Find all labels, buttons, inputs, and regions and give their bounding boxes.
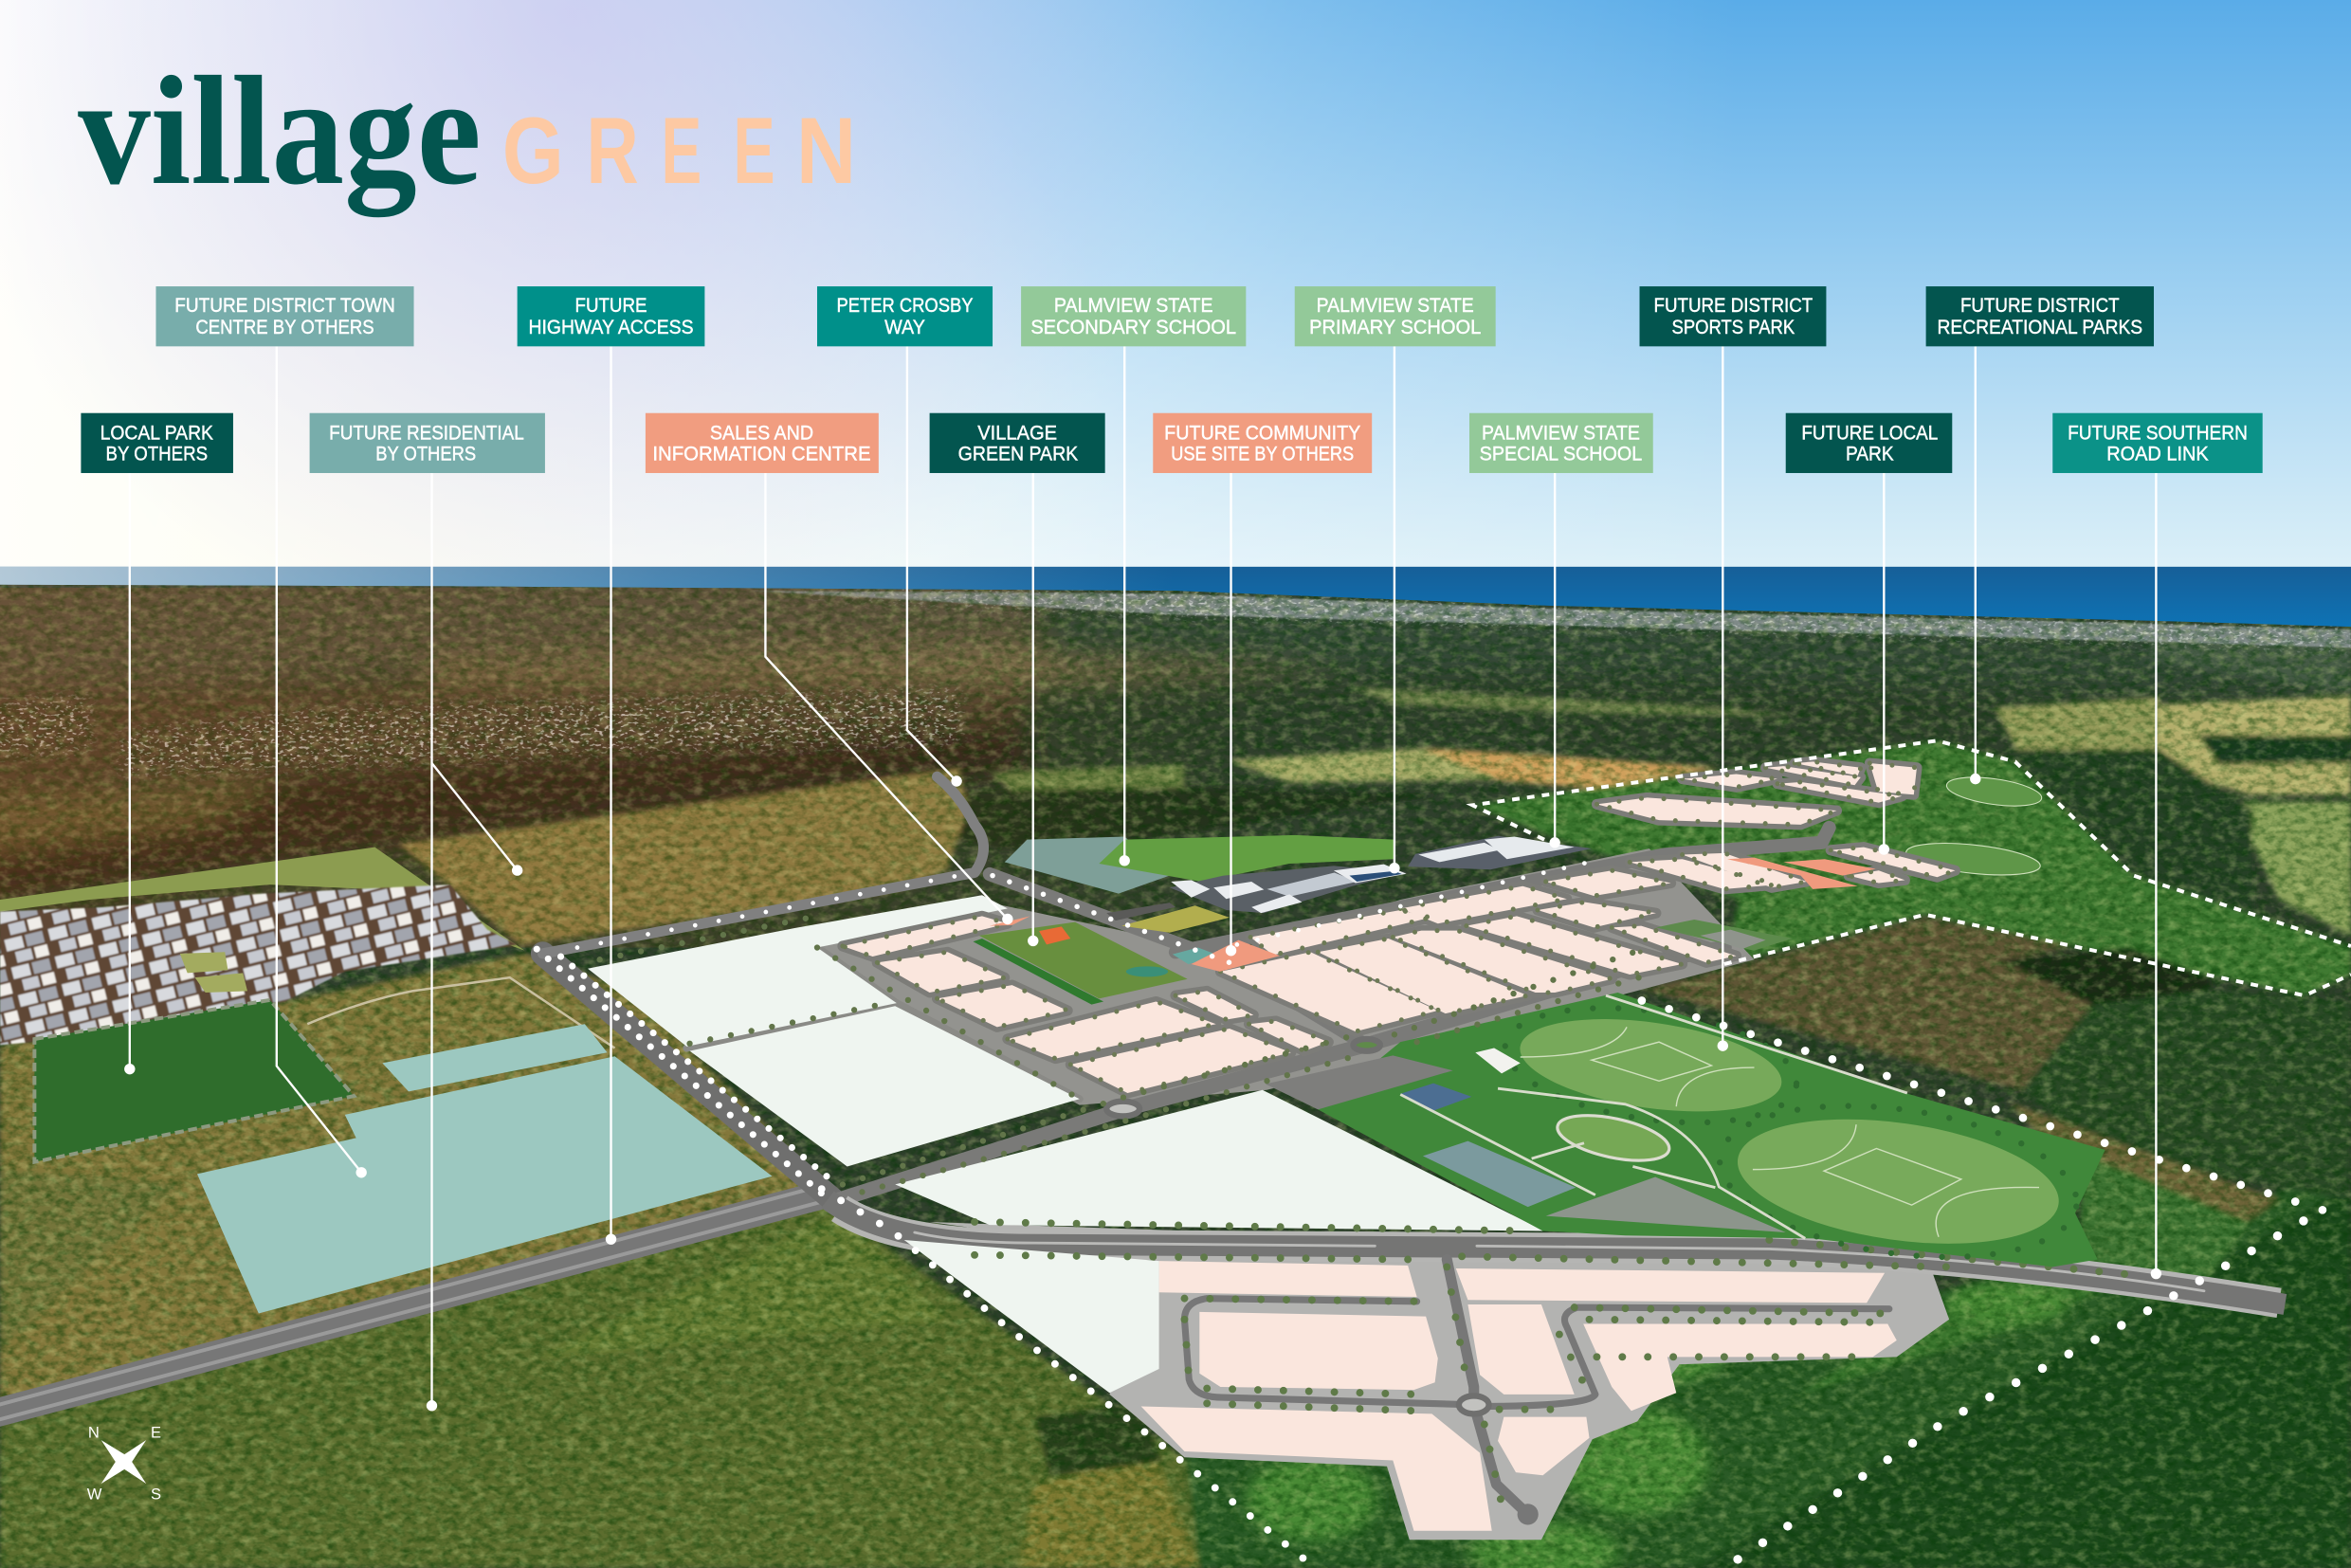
label: future southern road link: ROAD LINK [2106, 444, 2209, 465]
label: future district town centre: FUTURE DISTRICT TOWN [174, 295, 395, 317]
label: future district town centre: CENTRE BY OTHERS [195, 317, 374, 338]
label: peter crosby way [817, 286, 993, 346]
light grass texture [0, 900, 2351, 1568]
street grid around upper lots [843, 761, 1955, 1093]
photographic land base [0, 570, 2351, 1568]
logo word: green: G [502, 99, 564, 204]
label: palmview state primary school: PALMVIEW STATE [1317, 295, 1474, 317]
development ground under upper lots [817, 848, 1755, 1105]
leader lines and markers [124, 346, 2161, 1411]
label: future southern road link: FUTURE SOUTHERN [2068, 422, 2248, 444]
leader: district sports park [1718, 346, 1728, 1051]
northern sports oval [1514, 1005, 1787, 1126]
secondary school oval [1099, 835, 1394, 882]
main boulevard asphalt [828, 1199, 2285, 1304]
street trees around upper lots [843, 761, 1955, 1093]
school field [1121, 905, 1230, 933]
dirt track [307, 977, 614, 1048]
upper residential lots [843, 761, 1955, 1093]
pond [1423, 1141, 1576, 1207]
estate lawn above suburb [0, 848, 525, 951]
leader: community use site [1226, 472, 1236, 956]
town centre upper block [382, 1024, 608, 1091]
logo word: green: E [733, 99, 775, 204]
label: future district recreational parks: FUTURE DISTRICT [1960, 295, 2120, 317]
label: future residential by others: FUTURE RESIDENTIAL [329, 422, 524, 444]
label: future district recreational parks: RECREATIONAL PARKS [1937, 317, 2142, 338]
leader: sales and information centre [765, 472, 1013, 924]
cul-de-sac turning head [1518, 1504, 1539, 1524]
community use site [1173, 940, 1280, 972]
existing suburb houses [0, 884, 518, 1045]
car park [1266, 1055, 1453, 1109]
sea on the horizon [0, 567, 2351, 642]
label: future community use site by others [1153, 413, 1372, 473]
right forest and green land [1184, 1170, 2351, 1568]
lower block street trees [975, 1222, 2129, 1514]
pitch markings [1521, 1027, 2039, 1237]
leader: future district town centre [277, 346, 367, 1177]
village green park [973, 922, 1188, 1005]
sky background [0, 0, 2351, 570]
boundary south west [822, 1189, 1304, 1559]
road network [0, 776, 2285, 1514]
white future lots [588, 895, 1544, 1393]
label: village green park [930, 413, 1105, 473]
road side trees [600, 918, 1649, 1192]
label: palmview state secondary school [1021, 286, 1246, 346]
compass star [101, 1440, 146, 1484]
mid-left scrub [0, 954, 840, 1402]
leader: village green park [1028, 472, 1038, 946]
park tree rings [1498, 992, 2087, 1278]
leader: primary school [1389, 346, 1400, 873]
leader: special school [1549, 472, 1560, 848]
label: future district sports park [1640, 286, 1826, 346]
collector along schools [990, 828, 1830, 1045]
southern sports oval [1730, 1101, 2067, 1262]
label: palmview state secondary school: SECONDARY SCHOOL [1030, 317, 1236, 338]
label: peter crosby way: PETER CROSBY [837, 295, 974, 317]
label: palmview state special school: PALMVIEW STATE [1482, 422, 1640, 444]
label: future district recreational parks [1926, 286, 2154, 346]
leader: southern road link [2151, 472, 2161, 1279]
clubhouse roof [1475, 1048, 1521, 1073]
label: future southern road link [2052, 413, 2263, 473]
fine dashed boundaries [1724, 915, 2351, 995]
grey basin [1546, 1177, 1786, 1232]
leader: recreational parks [1970, 346, 1980, 784]
local park ovals east [1904, 773, 2044, 881]
development ground under lower lots [930, 1222, 1949, 1540]
connector with roundabouts [840, 948, 1724, 1199]
label: future residential by others: BY OTHERS [375, 444, 476, 465]
logo word: green: N [796, 99, 856, 204]
label: future local park: PARK [1846, 444, 1894, 465]
leader: future highway access [606, 346, 616, 1245]
warm light over left land [0, 588, 2351, 948]
logo [78, 44, 856, 218]
logo word: village: village [78, 44, 482, 218]
label: local park by others: BY OTHERS [106, 444, 208, 465]
label: sales and information centre [646, 413, 879, 473]
salmon residential lots [990, 858, 1876, 926]
label: future community use site by others: FUTURE COMMUNITY [1164, 422, 1360, 444]
compass [87, 1424, 161, 1504]
north south arterial [543, 954, 840, 1206]
label: palmview state special school [1469, 413, 1653, 473]
boundary south east [1738, 1210, 2323, 1559]
primary and secondary school buildings [1170, 865, 1407, 913]
compass letters: S [151, 1486, 161, 1504]
compass letters: N [88, 1424, 100, 1442]
central lower street [1447, 1260, 1528, 1514]
compass letters: W [87, 1486, 102, 1504]
compass letters [87, 1424, 161, 1504]
label: future highway access [518, 286, 704, 346]
label: future local park [1786, 413, 1952, 473]
site boundary white markers [537, 740, 2351, 1559]
park lawn [1318, 993, 2105, 1267]
label: future highway access: HIGHWAY ACCESS [529, 317, 694, 338]
label: future district town centre [155, 286, 414, 346]
leader: secondary school [1120, 346, 1130, 866]
label: future district sports park: FUTURE DISTRICT [1654, 295, 1813, 317]
label: local park by others: LOCAL PARK [100, 422, 213, 444]
sports park [1266, 992, 2105, 1278]
label: peter crosby way: WAY [884, 317, 925, 338]
school car park [1106, 903, 1176, 921]
left grass fields [399, 768, 967, 944]
logo word: green: R [586, 99, 639, 204]
city and suburb specks [0, 591, 2351, 774]
main boulevard verge [840, 1209, 2279, 1303]
stormwater area by secondary school [1005, 837, 1170, 894]
western lower street loop [1184, 1299, 1477, 1405]
label: sales and information centre: SALES AND [710, 422, 813, 444]
leader: future residential, south marker [427, 472, 437, 1411]
foliage texture [0, 582, 2351, 1568]
label: future residential by others [310, 413, 545, 473]
eastern lower street loop [1477, 1307, 1889, 1407]
leader: future residential, north marker [432, 763, 522, 876]
label: palmview state primary school: PRIMARY SCHOOL [1309, 317, 1481, 338]
label: village green park: VILLAGE [977, 422, 1057, 444]
boundary sports park [1625, 995, 2323, 1210]
label: local park by others [81, 413, 233, 473]
blended far land on the west [0, 570, 2351, 905]
courts [1400, 1084, 1471, 1112]
eastern green land [1472, 740, 2351, 995]
upper arterial and Peter Crosby Way [543, 776, 984, 954]
coastal city band [750, 591, 2351, 647]
special school buildings [1408, 836, 1592, 869]
road between white lots [686, 948, 1080, 1099]
logo word: green [502, 99, 856, 204]
bright tree canopies [1246, 1284, 2069, 1568]
label: village green park: GREEN PARK [958, 444, 1078, 465]
foreground meadow [0, 1210, 1201, 1568]
district town centre block [197, 1056, 773, 1313]
park paths [1400, 995, 1907, 1238]
label: future community use site by others: USE SITE BY OTHERS [1171, 444, 1354, 465]
leader: future local park [1879, 472, 1889, 855]
lower residential lots [1141, 1261, 1897, 1531]
boundary west double row [537, 949, 822, 1194]
suburb pocket lawns [180, 952, 247, 993]
label: future highway access: FUTURE [575, 295, 647, 317]
label: sales and information centre: INFORMATION CENTRE [652, 444, 871, 465]
label: palmview state secondary school: PALMVIEW STATE [1054, 295, 1213, 317]
boundary along arterial [577, 872, 975, 948]
compass letters: E [151, 1424, 161, 1442]
label: palmview state primary school [1295, 286, 1496, 346]
logo word: green: E [661, 99, 702, 204]
leader: peter crosby way [907, 346, 962, 787]
leader: local park by others [124, 472, 136, 1074]
label: palmview state special school: SPECIAL SCHOOL [1480, 444, 1642, 465]
label: future local park: FUTURE LOCAL [1801, 422, 1938, 444]
track oval [1554, 1107, 1673, 1169]
boulevard median [915, 1232, 2204, 1291]
southern highway road [0, 1195, 822, 1413]
local park by others block [34, 1000, 354, 1162]
roundabouts [1106, 1039, 1489, 1413]
label: future district sports park: SPORTS PARK [1672, 317, 1795, 338]
small reserve with grey square [1656, 920, 1793, 951]
